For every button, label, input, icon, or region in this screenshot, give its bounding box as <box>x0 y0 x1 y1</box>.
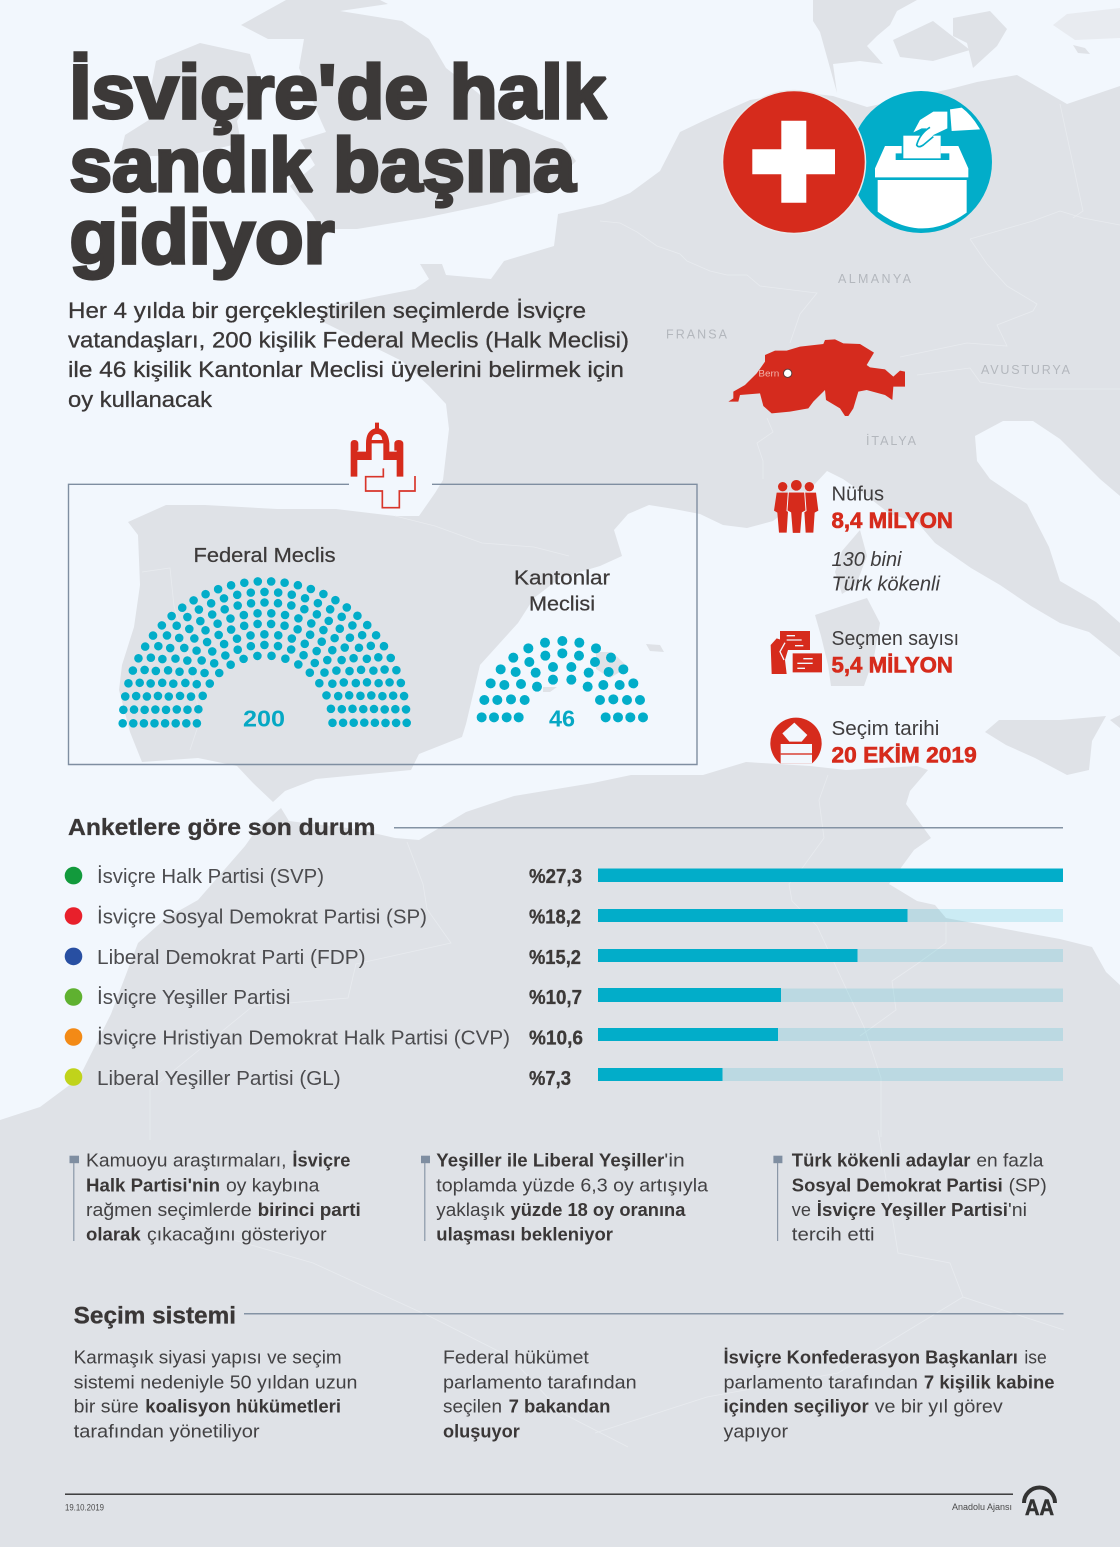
election system column 1: tarafından yönetiliyor <box>74 1420 260 1441</box>
stat: population: 130 bini <box>832 549 902 571</box>
note 2 <box>421 1150 709 1245</box>
stat: voters: 5,4 MİLYON <box>832 652 953 677</box>
note 1: Kamuoyu araştırmaları, <box>86 1150 286 1171</box>
title: İsviçre'de halk <box>70 50 607 135</box>
row: SP <box>65 905 1063 928</box>
row: Yeşiller: %10,7 <box>529 987 582 1009</box>
election system column 1 <box>74 1346 357 1441</box>
title <box>70 50 607 280</box>
note 2: yüzde 18 oy oranına <box>511 1199 686 1220</box>
footer: 19.10.2019 <box>65 1502 104 1512</box>
election system column 3: parlamento tarafından <box>724 1371 918 1392</box>
heading: election system: Seçim sistemi <box>74 1302 236 1329</box>
note 3: tercih etti <box>792 1224 875 1245</box>
election system column 1: bir süre <box>74 1396 139 1417</box>
row: SVP: %27,3 <box>529 866 582 888</box>
note 1: İsviçre <box>292 1150 350 1171</box>
icon: ballot in circle <box>770 718 822 763</box>
election system column 2: seçilen <box>443 1396 502 1417</box>
note 3: İsviçre Yeşiller Partisi <box>817 1199 1008 1220</box>
row: GL: Liberal Yeşiller Partisi (GL) <box>97 1068 341 1090</box>
note 3: Sosyal Demokrat Partisi <box>792 1174 1003 1196</box>
note 3: 'ni <box>1008 1199 1027 1220</box>
bar chart: party poll results <box>65 865 1063 1090</box>
seat count 46: 46 <box>549 706 575 732</box>
row: Yeşiller <box>65 986 1063 1009</box>
stat: population <box>774 480 953 596</box>
intro paragraph: ile 46 kişilik Kantonlar Meclisi üyelerini belirmek için <box>68 357 624 382</box>
chamber title: Kantonlar Meclisi: Kantonlar <box>514 567 610 589</box>
election system column 1: sistemi nedeniyle 50 yıldan uzun <box>74 1371 357 1392</box>
intro paragraph <box>68 298 629 412</box>
election system column 3: ve bir yıl görev <box>875 1396 1003 1417</box>
row: CVP <box>65 1027 1063 1050</box>
country labels on map: AVUSTURYA <box>981 363 1071 377</box>
stat: election date: 20 EKİM 2019 <box>832 742 977 767</box>
election system column 2 <box>443 1346 637 1441</box>
title: sandık başına <box>70 123 576 208</box>
icon: ballot box circle <box>850 91 992 233</box>
row: SVP <box>65 865 1063 888</box>
country labels on map <box>666 272 1071 448</box>
stat: election date: Seçim tarihi <box>832 718 939 740</box>
hemicycle: Kantonlar Meclisi 46 seats <box>477 636 648 722</box>
stat: population: Türk kökenli <box>832 574 941 596</box>
note 2: 'in <box>664 1150 685 1171</box>
note 2: Yeşiller ile Liberal Yeşiller <box>436 1150 664 1171</box>
election system column 3: ise <box>1024 1346 1047 1367</box>
chamber title: Kantonlar Meclisi <box>514 567 610 616</box>
note 3: en fazla <box>976 1150 1044 1171</box>
note 1: birinci parti <box>258 1199 361 1220</box>
election system column 2: parlamento tarafından <box>443 1371 637 1392</box>
note 1: Halk Partisi'nin <box>86 1174 220 1196</box>
note 1: olarak <box>86 1224 141 1245</box>
row: SP: %18,2 <box>529 906 581 928</box>
icon: hand with ballots <box>771 631 822 674</box>
icon: parliament building with cross <box>351 423 415 508</box>
note 1: oy kaybına <box>226 1174 320 1196</box>
election system column 3: 7 kişilik kabine <box>924 1371 1055 1392</box>
hemicycle: Federal Meclis 200 seats <box>123 581 407 723</box>
icon: three people <box>774 480 818 533</box>
icon: Swiss flag circle <box>722 90 866 234</box>
row: GL: %7,3 <box>529 1068 571 1090</box>
stat: population: Nüfus <box>832 484 884 506</box>
heading: polls: Anketlere göre son durum <box>68 814 376 840</box>
note 2: toplamda yüzde 6,3 oy artışıyla <box>436 1174 709 1196</box>
row: SVP: İsviçre Halk Partisi (SVP) <box>97 865 324 888</box>
stat: voters: Seçmen sayısı <box>832 628 959 650</box>
map: Switzerland with Bern marker: Bern <box>758 369 779 379</box>
footer: Anadolu Ajansı <box>952 1502 1012 1512</box>
election system column 1: Karmaşık siyasi yapısı ve seçim <box>74 1346 342 1367</box>
chamber title: Federal Meclis: Federal Meclis <box>194 545 336 567</box>
election system column 2: Federal hükümet <box>443 1346 589 1367</box>
country labels on map: İTALYA <box>866 434 917 448</box>
row: CVP: İsviçre Hristiyan Demokrat Halk Partisi (CVP) <box>97 1027 510 1050</box>
country labels on map: ALMANYA <box>838 272 912 286</box>
election system column 1: koalisyon hükümetleri <box>145 1396 341 1417</box>
country labels on map: FRANSA <box>666 328 728 342</box>
note 3 <box>773 1150 1047 1245</box>
intro paragraph: oy kullanacak <box>68 387 213 412</box>
row: FDP: Liberal Demokrat Parti (FDP) <box>97 947 366 969</box>
election system column 2: oluşuyor <box>443 1420 520 1441</box>
logo: Anadolu Ajansı: AA <box>1025 1495 1054 1520</box>
note 1: çıkacağını gösteriyor <box>147 1224 327 1245</box>
note 3: ve <box>792 1199 811 1220</box>
row: GL <box>65 1068 1063 1090</box>
map: Switzerland with Bern marker <box>728 339 905 416</box>
stat: voters <box>771 628 959 677</box>
title: gidiyor <box>70 195 334 280</box>
note 2: ulaşması bekleniyor <box>436 1224 613 1245</box>
stat: election date <box>770 718 977 767</box>
election system column 3: içinden seçiliyor <box>724 1396 869 1417</box>
note 3: (SP) <box>1009 1174 1047 1196</box>
intro paragraph: vatandaşları, 200 kişilik Federal Meclis (Halk Meclisi) <box>68 328 629 352</box>
row: SP: İsviçre Sosyal Demokrat Partisi (SP) <box>97 905 427 928</box>
row: FDP <box>65 947 1063 969</box>
panel: parliament seats <box>68 423 697 764</box>
stat: population: 8,4 MİLYON <box>832 508 953 533</box>
election system column 3 <box>724 1346 1055 1441</box>
note 1 <box>70 1150 361 1245</box>
row: FDP: %15,2 <box>529 947 581 969</box>
election system column 3: yapıyor <box>724 1420 788 1441</box>
chamber title: Kantonlar Meclisi: Meclisi <box>529 594 595 616</box>
seat count 200: 200 <box>243 706 285 732</box>
note 3: Türk kökenli adaylar <box>792 1150 970 1171</box>
row: CVP: %10,6 <box>529 1028 583 1050</box>
footer <box>65 1487 1055 1520</box>
note 2: yaklaşık <box>436 1199 505 1220</box>
note 1: rağmen seçimlerde <box>86 1199 252 1220</box>
intro paragraph: Her 4 yılda bir gerçekleştirilen seçimlerde İsviçre <box>68 298 586 323</box>
row: Yeşiller: İsviçre Yeşiller Partisi <box>97 986 290 1009</box>
election system column 3: İsviçre Konfederasyon Başkanları <box>724 1346 1018 1367</box>
election system column 2: 7 bakandan <box>509 1396 610 1417</box>
